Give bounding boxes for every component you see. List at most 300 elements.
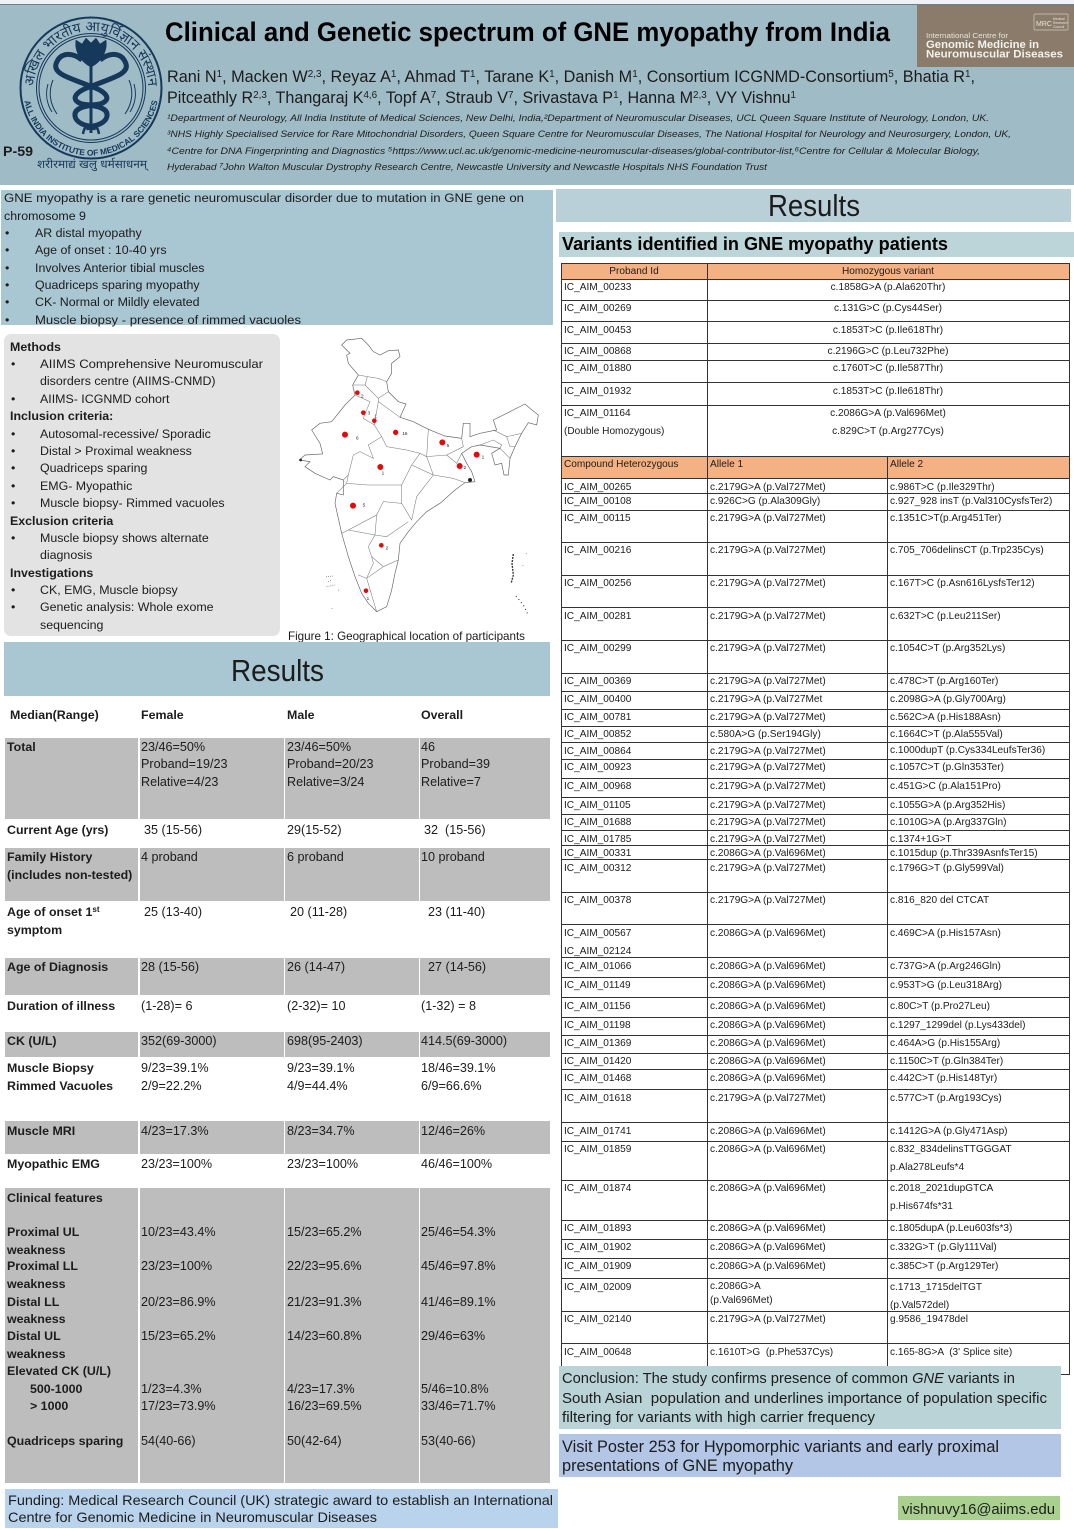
section: compound heterozygous variants: c.2086G>A (p.Val696Met)	[710, 1183, 826, 1194]
row: clinical features: 45/46=97.8%	[421, 1259, 496, 1273]
panel: introduction: •	[5, 313, 9, 327]
row: total: Proband=20/23	[287, 757, 373, 771]
row: current age	[7, 823, 486, 837]
section: compound heterozygous variants: c.2179G>A (p.Val727Met)	[710, 611, 826, 622]
section: compound heterozygous variants: IC_AIM_00567	[564, 928, 632, 939]
participant counts: 1	[374, 413, 377, 418]
section: compound heterozygous variants: c.1351C>T(p.Arg451Ter)	[890, 513, 1001, 524]
authors: , Hanna M	[619, 89, 693, 107]
row: muscle biopsy: 9/23=39.1%	[141, 1061, 209, 1075]
authors: Rani N	[167, 68, 217, 86]
authors: , Topf A	[377, 89, 431, 107]
section: compound heterozygous variants: IC_AIM_02124	[564, 946, 632, 957]
icon: AIIMS logo: ALL INDIA INSTITUTE OF MEDICAL SCIENCES	[24, 100, 158, 156]
section: compound heterozygous variants: c.562C>A (p.His188Asn)	[890, 712, 1001, 723]
section: compound heterozygous variants: c.2086G>A (p.Val696Met)	[710, 1144, 826, 1155]
participant counts: 2	[464, 465, 467, 470]
section: compound heterozygous variants: c.442C>T (p.His148Tyr)	[890, 1073, 997, 1084]
row: age of onset: symptom	[7, 923, 62, 937]
section: compound heterozygous variants: c.1010G>A (p.Arg337Gln)	[890, 817, 1006, 828]
row: clinical features: 29/46=63%	[421, 1329, 485, 1343]
section: compound heterozygous variants: IC_AIM_00781	[564, 712, 632, 723]
panel: introduction: Involves Anterior tibial muscles	[35, 261, 204, 275]
row: family history	[7, 850, 485, 882]
authors: , Bhatia R	[894, 68, 965, 86]
section: compound heterozygous variants: c.580A>G (p.Ser194Gly)	[710, 729, 821, 740]
section: compound heterozygous variants: c.2086G>A (p.Val696Met)	[710, 848, 826, 859]
participant counts: 16	[402, 431, 408, 436]
section: compound heterozygous variants: c.478C>T (p.Arg160Ter)	[890, 676, 998, 687]
panel: methods: Quadriceps sparing	[40, 461, 148, 475]
row: age of onset: 23 (11-40)	[428, 905, 485, 919]
row: duration of illness: (1-32) = 8	[421, 999, 476, 1013]
row: total: 46	[421, 740, 435, 754]
section: compound heterozygous variants: c.2086G>A (p.Val696Met)	[710, 1056, 826, 1067]
section: compound heterozygous variants: c.986T>C (p.Ile329Thr)	[890, 482, 995, 493]
row: clinical features: Proximal UL	[7, 1225, 80, 1239]
row: total: Relative=7	[421, 775, 481, 789]
authors: 2,3	[693, 90, 707, 101]
section: compound heterozygous variants: c.2086G>A (p.Val696Met)	[710, 1242, 826, 1253]
row: current age: 32 (15-56)	[424, 823, 486, 837]
row: clinical features: weakness	[6, 1243, 66, 1257]
section: compound heterozygous variants: (p.Val572del)	[890, 1300, 949, 1311]
authors: 2,3	[253, 90, 267, 101]
section: compound heterozygous variants: IC_AIM_00216	[564, 545, 632, 556]
section: compound heterozygous variants: c.2179G>A (p.Val727Met)	[710, 1093, 826, 1104]
table: clinical features	[5, 708, 550, 1483]
row: clinical features: 54(40-66)	[141, 1434, 196, 1448]
section: homozygous variants	[564, 266, 948, 437]
section: homozygous variants: Homozygous variant	[842, 266, 934, 277]
staff and serpents	[47, 38, 135, 134]
section: compound heterozygous variants: IC_AIM_02140	[564, 1314, 632, 1325]
section: compound heterozygous variants: IC_AIM_00864	[564, 746, 632, 757]
authors: ,	[970, 68, 975, 86]
section: compound heterozygous variants: c.1150C>T (p.Gln384Ter)	[890, 1056, 1003, 1067]
section: compound heterozygous variants: c.2086G>A (p.Val696Met)	[710, 1001, 826, 1012]
section: compound heterozygous variants: IC_AIM_01909	[564, 1261, 632, 1272]
row: muscle biopsy	[7, 1061, 496, 1093]
panel: methods: •	[11, 479, 15, 493]
section: compound heterozygous variants: IC_AIM_00923	[564, 762, 632, 773]
row: clinical features: 23/23=100%	[141, 1259, 212, 1273]
row: CK: CK (U/L)	[7, 1034, 57, 1048]
logo: ICGNMD: Genomic Medicine in	[926, 39, 1039, 51]
section: compound heterozygous variants: c.2086G>A (p.Val696Met)	[710, 1038, 826, 1049]
row: clinical features: 1/23=4.3%	[141, 1382, 202, 1396]
participant counts	[356, 394, 485, 601]
row: muscle MRI: 4/23=17.3%	[141, 1124, 209, 1138]
section: compound heterozygous variants: c.816_820 del CTCAT	[890, 895, 989, 906]
panel: methods: diagnosis	[40, 548, 92, 562]
section: compound heterozygous variants: g.9586_19478del	[890, 1314, 968, 1325]
row: total: Total	[7, 740, 36, 754]
section: compound heterozygous variants: c.2179G>A (p.Val727Met)	[710, 817, 826, 828]
row: total: Proband=19/23	[141, 757, 227, 771]
section: homozygous variants: IC_AIM_00868	[564, 346, 632, 357]
row: clinical features: 15/23=65.2%	[141, 1329, 216, 1343]
row: current age: 35 (15-56)	[144, 823, 202, 837]
panel: introduction: AR distal myopathy	[35, 226, 143, 240]
authors: 4,6	[363, 90, 378, 101]
row: age of diagnosis: Age of Diagnosis	[7, 960, 108, 974]
section: compound heterozygous variants: c.2179G>A (p.Val727Met)	[710, 513, 826, 524]
section: compound heterozygous variants: c.2179G>A (p.Val727Met)	[710, 746, 826, 757]
section: compound heterozygous variants: c.2179G>A (p.Val727Met)	[710, 545, 826, 556]
panel: methods: •	[11, 444, 15, 458]
section: compound heterozygous variants	[564, 459, 1052, 1358]
contact email: vishnuvy16@aiims.edu	[902, 1501, 1055, 1518]
row: total: Proband=39	[421, 757, 490, 771]
section: compound heterozygous variants: Allele 2	[890, 459, 923, 470]
section: compound heterozygous variants: c.2179G>A (p.Val727Met)	[710, 863, 826, 874]
row: myopathic EMG: Myopathic EMG	[7, 1157, 100, 1171]
heading: variants: Variants identified in GNE myopathy patients	[562, 234, 948, 254]
title: Clinical and Genetic spectrum of GNE myopathy from India	[165, 17, 890, 47]
row: clinical features: 50(42-64)	[287, 1434, 342, 1448]
section: homozygous variants: IC_AIM_01932	[564, 386, 632, 397]
logo motto: शरीरमाद्यं खलु धर्मसाधनम्	[37, 157, 149, 172]
section: compound heterozygous variants: IC_AIM_00108	[564, 496, 632, 507]
panel: methods: •	[11, 357, 15, 371]
row: clinical features: 5/46=10.8%	[421, 1382, 489, 1396]
row: muscle MRI: 8/23=34.7%	[287, 1124, 355, 1138]
row: clinical features: 53(40-66)	[421, 1434, 476, 1448]
row: muscle MRI: 12/46=26%	[421, 1124, 485, 1138]
section: compound heterozygous variants: c.577C>T (p.Arg193Cys)	[890, 1093, 1002, 1104]
row: muscle biopsy: 6/9=66.6%	[421, 1079, 482, 1093]
panel: conclusion: filtering for variants with high carrier frequency	[562, 1409, 876, 1426]
section: compound heterozygous variants: IC_AIM_01874	[564, 1183, 632, 1194]
row: muscle MRI: Muscle MRI	[7, 1124, 75, 1138]
table header row: Median(Range)	[10, 708, 99, 722]
affiliations	[167, 112, 1011, 172]
section: compound heterozygous variants: (p.Val696Met)	[710, 1295, 773, 1306]
section: compound heterozygous variants: IC_AIM_00265	[564, 482, 632, 493]
poster number: P-59	[3, 144, 33, 159]
section: compound heterozygous variants: c.2086G>A (p.Val696Met)	[710, 928, 826, 939]
funding note: Centre for Genomic Medicine in Neuromuscular Diseases	[8, 1509, 377, 1525]
section: compound heterozygous variants: IC_AIM_01198	[564, 1020, 631, 1031]
section: homozygous variants: c.131G>C (p.Cys44Ser)	[834, 303, 942, 314]
panel: methods: •	[11, 600, 15, 614]
authors: , Macken W	[222, 68, 308, 86]
row: muscle biopsy: Rimmed Vacuoles	[7, 1079, 113, 1093]
figure caption: Figure 1: Geographical location of participants	[288, 629, 525, 643]
panel: introduction: •	[5, 261, 9, 275]
row: clinical features: 25/46=54.3%	[421, 1225, 496, 1239]
section: compound heterozygous variants: IC_AIM_01066	[564, 961, 632, 972]
row: clinical features: 41/46=89.1%	[421, 1295, 496, 1309]
panel: methods: •	[11, 531, 15, 545]
row: CK: 352(69-3000)	[141, 1034, 217, 1048]
heading: results right	[556, 188, 1071, 223]
row: muscle MRI	[7, 1124, 485, 1138]
section: compound heterozygous variants: IC_AIM_00256	[564, 578, 632, 589]
authors: 5	[888, 69, 894, 80]
row: clinical features: Proximal LL	[7, 1259, 78, 1273]
heading: results left	[4, 642, 550, 696]
panel: introduction: Quadriceps sparing myopathy	[35, 278, 200, 292]
authors: , Thangaraj K	[267, 89, 364, 107]
participant counts: 3	[368, 410, 371, 415]
row: clinical features: 15/23=65.2%	[287, 1225, 362, 1239]
panel: methods: disorders centre (AIIMS-CNMD)	[40, 374, 216, 388]
section: compound heterozygous variants: c.165-8G>A (3' Splice site)	[890, 1347, 1012, 1358]
row: age of diagnosis	[7, 960, 486, 974]
section: homozygous variants: c.1853T>C (p.Ile618Thr)	[833, 325, 943, 336]
row: muscle biopsy: 18/46=39.1%	[421, 1061, 496, 1075]
row: clinical features: 14/23=60.8%	[287, 1329, 362, 1343]
contact email	[898, 1496, 1060, 1520]
section: compound heterozygous variants: c.2179G>A (p.Val727Met)	[710, 834, 826, 845]
panel: methods: Autosomal-recessive/ Sporadic	[40, 427, 211, 441]
panel: introduction: •	[5, 278, 9, 292]
section: compound heterozygous variants: IC_AIM_01468	[564, 1073, 632, 1084]
section: homozygous variants: c.829C>T (p.Arg277Cys)	[832, 426, 944, 437]
panel: methods: •	[11, 392, 15, 406]
panel: conclusion: Conclusion: The study confirms presence of common GNE variants in	[562, 1370, 1015, 1387]
authors: 1	[391, 69, 397, 80]
row: clinical features: > 1000	[30, 1399, 68, 1413]
row: clinical features: 17/23=73.9%	[141, 1399, 216, 1413]
row: total: Relative=3/24	[287, 775, 364, 789]
row: clinical features: Distal UL	[7, 1329, 61, 1343]
participant counts: 5	[447, 443, 450, 448]
funding note	[5, 1489, 558, 1528]
section: compound heterozygous variants: IC_AIM_01741	[564, 1126, 632, 1137]
row: duration of illness	[7, 999, 476, 1013]
authors: , Danish M	[555, 68, 632, 86]
row: myopathic EMG: 23/23=100%	[141, 1157, 212, 1171]
section: compound heterozygous variants: c.2179G>A (p.Val727Met)	[710, 578, 826, 589]
affiliations: Hyderabad ⁷John Walton Muscular Dystrophy Research Centre, Newcastle University and Newcastle Hospitals NHS Foundation Trust	[167, 161, 767, 172]
section: compound heterozygous variants: c.2179G>A (p.Val727Met)	[710, 482, 826, 493]
panel: introduction: GNE myopathy is a rare genetic neuromuscular disorder due to mutation in GNE gene on	[4, 191, 524, 205]
panel: methods: •	[11, 461, 15, 475]
section: compound heterozygous variants: c.2179G>A (p.Val727Met)	[710, 762, 826, 773]
section: compound heterozygous variants: IC_AIM_01156	[564, 1001, 631, 1012]
section: compound heterozygous variants: c.2086G>A (p.Val696Met)	[710, 1073, 826, 1084]
table header row: Female	[141, 708, 184, 722]
row: age of onset: 20 (11-28)	[290, 905, 347, 919]
table header row: Male	[287, 708, 315, 722]
callout: visit poster 253: Visit Poster 253 for Hypomorphic variants and early proximal	[562, 1437, 999, 1456]
section: compound heterozygous variants: IC_AIM_01420	[564, 1056, 632, 1067]
panel: methods: AIIMS Comprehensive Neuromuscular	[40, 357, 263, 371]
section: compound heterozygous variants: c.2086G>A (p.Val696Met)	[710, 980, 826, 991]
row: clinical features: Clinical features	[7, 1191, 103, 1205]
authors: 1	[965, 69, 971, 80]
section: compound heterozygous variants: c.1055G>A (p.Arg352His)	[890, 800, 1005, 811]
row: muscle biopsy: 2/9=22.2%	[141, 1079, 202, 1093]
row: duration of illness: Duration of illness	[7, 999, 115, 1013]
row: clinical features: 500-1000	[30, 1382, 82, 1396]
section: compound heterozygous variants: IC_AIM_00968	[564, 781, 632, 792]
row: age of diagnosis: 27 (14-56)	[428, 960, 486, 974]
authors: 1	[549, 69, 555, 80]
row: total: 23/46=50%	[287, 740, 351, 754]
row: CK	[7, 1034, 507, 1048]
table: variants	[562, 263, 1070, 1375]
row: family history: Family History	[7, 850, 92, 864]
section: compound heterozygous variants: c.926C>G (p.Ala309Gly)	[710, 496, 820, 507]
logo: ICGNMD: Research	[1053, 21, 1068, 25]
section: compound heterozygous variants: c.1805dupA (p.Leu603fs*3)	[890, 1223, 1012, 1234]
row: clinical features: 21/23=91.3%	[287, 1295, 362, 1309]
section: compound heterozygous variants: c.2086G>A (p.Val696Met)	[710, 1126, 826, 1137]
row: clinical features: 20/23=86.9%	[141, 1295, 216, 1309]
section: compound heterozygous variants: c.2086G>A (p.Val696Met)	[710, 1223, 826, 1234]
section: compound heterozygous variants: c.2179G>A (p.Val727Met)	[710, 895, 826, 906]
authors: 7	[431, 90, 437, 101]
section: compound heterozygous variants: IC_AIM_01618	[564, 1093, 632, 1104]
section: compound heterozygous variants: p.His674fs*31	[890, 1201, 953, 1212]
section: compound heterozygous variants: IC_AIM_00648	[564, 1347, 632, 1358]
logo: ICGNMD	[917, 5, 1074, 67]
panel: methods: Genetic analysis: Whole exome	[40, 600, 214, 614]
chart: map of India with participant locations	[299, 338, 538, 613]
row: age of onset: st	[92, 905, 100, 914]
section: compound heterozygous variants: c.2179G>A (p.Val727Met)	[710, 643, 826, 654]
row: total: Relative=4/23	[141, 775, 218, 789]
row: family history: 4 proband	[141, 850, 198, 864]
row: clinical features: 16/23=69.5%	[287, 1399, 362, 1413]
section: compound heterozygous variants: c.2098G>A (p.Gly700Arg)	[890, 694, 1006, 705]
participant counts: 6	[356, 435, 359, 440]
authors: , Reyaz A	[321, 68, 391, 86]
table header row: Overall	[421, 708, 463, 722]
panel: methods: •	[11, 583, 15, 597]
row: clinical features: 4/23=17.3%	[287, 1382, 355, 1396]
section: compound heterozygous variants: IC_AIM_00378	[564, 895, 632, 906]
header banner	[0, 0, 1074, 185]
callout: visit poster 253: presentations of GNE myopathy	[562, 1456, 793, 1475]
authors: , Srivastava P	[513, 89, 613, 107]
panel: methods: Methods	[10, 340, 61, 354]
section: compound heterozygous variants: c.2086G>A (p.Val696Met)	[710, 1261, 826, 1272]
authors: 1	[791, 90, 796, 101]
authors: 1	[632, 69, 638, 80]
section: compound heterozygous variants: IC_AIM_01149	[564, 980, 631, 991]
section: compound heterozygous variants: c.1374+1G>T	[890, 834, 952, 845]
panel: methods: Inclusion criteria:	[10, 409, 113, 423]
section: homozygous variants: c.2196G>C (p.Leu732Phe)	[828, 346, 948, 357]
section: compound heterozygous variants: c.1610T>G (p.Phe537Cys)	[710, 1347, 833, 1358]
section: compound heterozygous variants: c.332G>T (p.Gly111Val)	[890, 1242, 997, 1253]
row: muscle biopsy: 9/23=39.1%	[287, 1061, 355, 1075]
row: clinical features	[6, 1191, 496, 1448]
section: compound heterozygous variants: IC_AIM_00299	[564, 643, 632, 654]
section: compound heterozygous variants: c.2179G>A (p.Val727Met)	[710, 1314, 826, 1325]
section: compound heterozygous variants: c.2179G>A (p.Val727Met)	[710, 676, 826, 687]
panel: methods: CK, EMG, Muscle biopsy	[40, 583, 179, 597]
panel: methods: Muscle biopsy- Rimmed vacuoles	[40, 496, 225, 510]
participant counts: 1	[482, 454, 485, 459]
section: homozygous variants: c.1853T>C (p.Ile618Thr)	[833, 386, 943, 397]
row: clinical features: 10/23=43.4%	[141, 1225, 216, 1239]
row: clinical features: Distal LL	[7, 1295, 60, 1309]
logo: ICGNMD: Neuromuscular Diseases	[926, 48, 1063, 60]
icon: AIIMS logo	[20, 16, 162, 160]
section: compound heterozygous variants: c.1054C>T (p.Arg352Lys)	[890, 643, 1005, 654]
section: compound heterozygous variants: c.1000dupT (p.Cys334LeufsTer36)	[890, 745, 1045, 756]
participant location markers	[342, 390, 480, 593]
section: homozygous variants: IC_AIM_01880	[564, 363, 632, 374]
panel: methods	[4, 334, 280, 636]
authors: , Ahmad T	[396, 68, 470, 86]
row: age of onset: 25 (13-40)	[144, 905, 202, 919]
section: compound heterozygous variants: c.1412G>A (p.Gly471Asp)	[890, 1126, 1008, 1137]
section: compound heterozygous variants: IC_AIM_01785	[564, 834, 632, 845]
row: CK: 414.5(69-3000)	[421, 1034, 507, 1048]
logo: ICGNMD: MRC	[1036, 21, 1052, 28]
section: compound heterozygous variants: Compound Heterozygous	[564, 459, 678, 470]
section: compound heterozygous variants: c.2018_2021dupGTCA	[890, 1183, 994, 1194]
section: compound heterozygous variants: c.705_706delinsCT (p.Trp235Cys)	[890, 545, 1044, 556]
row: myopathic EMG	[7, 1157, 492, 1171]
section: compound heterozygous variants: c.737G>A (p.Arg246Gln)	[890, 961, 1001, 972]
panel: introduction: Age of onset : 10-40 yrs	[35, 243, 167, 257]
section: compound heterozygous variants: IC_AIM_00281	[564, 611, 632, 622]
section: compound heterozygous variants: c.832_834delinsTTGGGAT	[890, 1144, 1012, 1155]
table header row	[10, 708, 463, 722]
row: age of diagnosis: 28 (15-56)	[141, 960, 199, 974]
authors: 1	[613, 90, 619, 101]
section: compound heterozygous variants: IC_AIM_00369	[564, 676, 632, 687]
section: compound heterozygous variants: c.167T>C (p.Asn616LysfsTer12)	[890, 578, 1035, 589]
row: duration of illness: (1-28)= 6	[141, 999, 192, 1013]
row: total	[7, 740, 490, 789]
row: myopathic EMG: 23/23=100%	[287, 1157, 358, 1171]
row: age of onset: Age of onset 1	[7, 905, 92, 919]
row: clinical features: Quadriceps sparing	[7, 1434, 123, 1448]
section: homozygous variants: (Double Homozygous)	[564, 426, 664, 437]
section: homozygous variants: IC_AIM_00233	[564, 282, 632, 293]
section: compound heterozygous variants: IC_AIM_00852	[564, 729, 632, 740]
panel: introduction: Muscle biopsy - presence of rimmed vacuoles	[35, 313, 301, 327]
row: family history: (includes non-tested)	[7, 868, 132, 882]
row: total: 23/46=50%	[141, 740, 205, 754]
heading: variants	[559, 232, 1074, 257]
section: compound heterozygous variants: c.1015dup (p.Thr339AsnfsTer15)	[890, 848, 1038, 859]
authors: , Tarane K	[476, 68, 549, 86]
participant counts: 2	[361, 394, 364, 399]
section: compound heterozygous variants: c.2086G>A	[710, 1281, 761, 1292]
callout: visit poster 253	[559, 1434, 1061, 1477]
section: compound heterozygous variants: IC_AIM_01859	[564, 1144, 632, 1155]
panel: methods: •	[11, 496, 15, 510]
panel: methods: EMG- Myopathic	[40, 479, 132, 493]
logo: ICGNMD: International Centre for	[926, 31, 1009, 40]
panel: methods: Exclusion criteria	[10, 514, 113, 528]
section: compound heterozygous variants: c.1664C>T (p.Ala555Val)	[890, 729, 1003, 740]
section: compound heterozygous variants: c.2179G>A (p.Val727Met)	[710, 712, 826, 723]
logo: ICGNMD: Medical	[1053, 17, 1065, 21]
panel: introduction	[1, 190, 553, 327]
section: compound heterozygous variants: IC_AIM_01893	[564, 1223, 632, 1234]
panel: conclusion: South Asian population and underlines importance of population specific	[562, 1390, 1048, 1407]
section: compound heterozygous variants: c.927_928 insT (p.Val310CysfsTer2)	[890, 496, 1052, 507]
authors: 1	[217, 69, 223, 80]
panel: conclusion	[559, 1366, 1061, 1429]
row: myopathic EMG: 46/46=100%	[421, 1157, 492, 1171]
row: clinical features: 33/46=71.7%	[421, 1399, 496, 1413]
section: compound heterozygous variants: c.2086G>A (p.Val696Met)	[710, 961, 826, 972]
section: compound heterozygous variants: IC_AIM_01902	[564, 1242, 632, 1253]
section: compound heterozygous variants: p.Ala278Leufs*4	[890, 1162, 964, 1173]
